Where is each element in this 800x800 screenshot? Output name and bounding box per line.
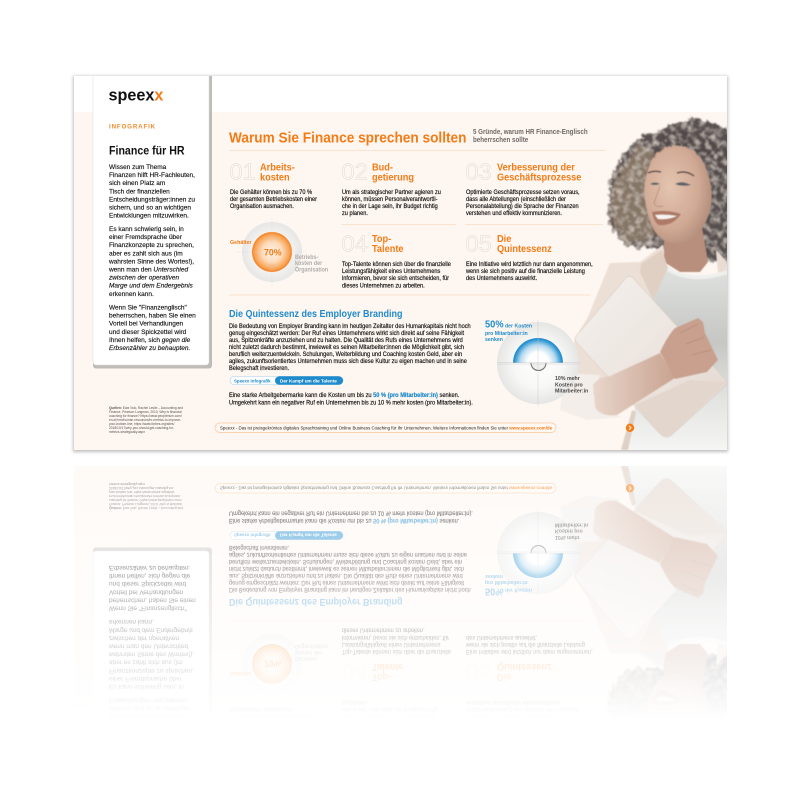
forearm (593, 353, 675, 415)
sidebar paragraph 1: Entwicklungen mitzuwirken. (109, 212, 189, 220)
sidebar paragraph 2: wahrsten Sinne des Wortes!), (108, 258, 194, 265)
reason 04: Top-Talente können sich über die finanzielle (342, 262, 451, 268)
semicircle chart: 50 percent less, 10 percent more: Mitarbeiter:in (555, 388, 588, 395)
reason 01: kosten (260, 172, 290, 184)
reason 01: Organisation ausmachen. (230, 204, 294, 210)
footer pill: Speexx - Das ist preisgekröntes digitales Sprachtraining und Online Business Coaching für Ihr Unternehmen. Weitere Informationen finden Sie unter www.speexx.com/de (220, 425, 552, 431)
sidebar paragraph 3: Vorteil bei Verhandlungen (109, 321, 183, 328)
laptop lower shade (635, 380, 726, 437)
sources note: en-in/hrm/human-resources/hr-metrics-to-improve- (109, 418, 181, 422)
sources note: coaching for finance? https://www.peoplehum.com/ (109, 414, 182, 418)
reason 02: che in der Lage sein, ihr Budget richtig (342, 204, 438, 210)
reason 03: Optimierte Geschäftsprozesse setzen voraus, (466, 190, 580, 196)
sources note: metrics-strategically.aspx (109, 430, 145, 434)
semicircle chart: 50 percent less, 10 percent more: 10% mehr (555, 376, 581, 382)
reason 03: verstehen und effektiv kommunizieren. (466, 211, 562, 217)
photo: smiling woman holding a laptop (560, 118, 732, 452)
sidebar paragraph 1: Finanzen hilft HR-Fachleuten, (109, 172, 195, 179)
infographic sheet with mirrored floor reflection (74, 76, 727, 450)
eyes (650, 182, 691, 186)
reason 01: der gesamten Betriebskosten einer (230, 197, 317, 203)
jacket (570, 245, 672, 400)
sidebar paragraph 3: Wenn Sie "Finanzenglisch" (109, 304, 187, 312)
brows (648, 171, 694, 176)
reason 02: zu planen. (342, 211, 368, 217)
main title: Warum Sie Finance sprechen sollten (229, 130, 466, 147)
sidebar paragraph 1: sich einen Platz am (109, 180, 166, 187)
employer branding section (229, 309, 473, 407)
donut chart: 70 percent salaries (230, 218, 329, 286)
subtitle: 5 Gründe, warum HR Finance-Englisch (473, 129, 588, 136)
reason 05: Eine Initiative wird letztlich nur dann angenommen, (466, 262, 593, 268)
sources note: Finance, Pearson Longman, 2010; Why is financial (109, 410, 182, 414)
link pill: Speexx Infografik (234, 378, 271, 384)
reason 02 (342, 158, 441, 217)
reason 03: Geschäftsprozesse (497, 172, 581, 184)
sidebar paragraph 3: beherrschen, haben Sie einen (109, 312, 196, 320)
sidebar heading: Finance für HR (109, 145, 185, 158)
sidebar paragraph 3: Erbsenzähler zu behaupten. (109, 345, 190, 352)
semicircle chart: 50 percent less, 10 percent more: 50%der Kosten (485, 319, 532, 331)
peach page background (74, 112, 727, 450)
reason 01: Arbeits- (260, 162, 295, 174)
donut chart: 70 percent salaries: Gehälter (230, 240, 252, 246)
reason 05 (465, 230, 593, 282)
lapel (640, 250, 668, 300)
sidebar paragraph 2: aber es zahlt sich aus (im (109, 250, 183, 257)
sidebar paragraph 2: einer Fremdsprache über (109, 234, 183, 241)
sidebar paragraph 1: Entscheidungsträger:innen zu (109, 196, 195, 203)
reason 04: informieren, bevor sie sich entscheiden, für (342, 276, 449, 282)
sidebar paragraph 2: zwischen der operativen (108, 274, 179, 282)
sidebar paragraph 2: wenn man den Unterschied (109, 266, 188, 274)
nose (654, 186, 663, 207)
sources note: Quellen: (109, 406, 122, 410)
donut chart: 70 percent salaries: kosten der (295, 261, 323, 267)
reason 04: 04 (342, 230, 368, 256)
employer branding section: Eine starke Arbeitgebermarke kann die Kosten um bis zu 50 % (pro Mitarbeiter:in) senken. (229, 393, 459, 399)
reason 04: Leistungsfähigkeit eines Unternehmens (342, 269, 440, 275)
reason 05: Die (497, 234, 511, 245)
employer branding section: Die Quintessenz des Employer Branding (229, 309, 403, 320)
reason 02: getierung (372, 172, 414, 184)
reason 05: des Unternehmens auswirkt. (466, 276, 537, 282)
donut chart: 70 percent salaries: 70% (264, 248, 282, 258)
employer branding section: Umgekehrt kann ein negativer Ruf ein Unternehmen bis zu 10 % mehr kosten (pro Mitarbeiter:in). (229, 400, 473, 407)
reason 04: Talente (372, 244, 404, 255)
reason 03 (466, 158, 581, 217)
sidebar paragraph 1: sichern, und so an wichtigen (109, 204, 191, 212)
sources note: Ewa Volo, Rachel Leslie – Accounting and (122, 406, 183, 410)
kicker: INFOGRAFIK (109, 123, 156, 130)
subtitle: beherrschen sollte (473, 137, 529, 144)
neck (664, 228, 708, 272)
reason 04: dieses Unternehmen zu arbeiten. (342, 283, 425, 289)
shirt (628, 268, 732, 452)
reason 05: 05 (466, 230, 492, 256)
reason 03: Personalabteilung) die Sprache der Finanzen (466, 204, 579, 210)
reason 01: 01 (230, 158, 256, 184)
link pill: Der Kampf um die Talente (280, 378, 337, 385)
employer branding section: Die Bedeutung von Employer Branding kann im heutigen Zeitalter des Humankapitals nicht hoch (229, 324, 471, 330)
face (644, 145, 712, 243)
sidebar paragraph 2: Marge und dem Endergebnis (109, 283, 193, 290)
reason 03: Verbesserung der (497, 162, 575, 174)
hair over forehead (650, 130, 726, 200)
reason 02: Bud- (372, 162, 393, 174)
jacket right shoulder (716, 250, 727, 276)
sidebar paragraph 2: Finanzkonzepte zu sprechen, (109, 242, 194, 249)
sidebar paragraph 1: Tisch der finanziellen (109, 188, 170, 195)
logo: speexx (108, 86, 163, 104)
reason 05: Quintessenz (497, 244, 552, 255)
sidebar paragraph 3: Ihnen helfen, sich gegen die (109, 337, 190, 344)
sheet drop shadow (74, 76, 727, 450)
reason 02: 02 (342, 158, 368, 184)
footer pill (215, 423, 556, 432)
employer branding section: beruflich weiterzuentwickeln. Schulungen, Weiterbildung und Coaching kosten Geld, aber ein (229, 352, 462, 358)
lips and teeth (652, 211, 681, 225)
reason 04: Top- (372, 234, 391, 245)
reason 01: Die Gehälter können bis zu 70 % (230, 190, 312, 196)
employer branding section: agiles, zukunftsorientiertes Unternehmen muss sich diese Kultur zu eigen machen und in seine (229, 359, 468, 365)
sidebar paragraph 2: erkennen kann. (109, 291, 154, 298)
laptop (575, 276, 727, 437)
sidebar paragraph 1: Wissen zum Thema (109, 164, 167, 171)
employer branding section: nicht zuletzt dadurch bestimmt, inwieweit es seinen Mitarbeiter:innen die Möglichkeit gibt, sich (229, 345, 464, 351)
jacket lower strip (621, 410, 636, 450)
employer branding section: Belegschaft investieren. (229, 366, 289, 372)
reason 01 (230, 158, 317, 210)
sidebar paragraph 2: Es kann schwierig sein, in (109, 226, 184, 233)
orange arrow button (626, 424, 634, 432)
reason 04 (342, 230, 451, 289)
reason 03: dass alle Abteilungen (einschließlich der (466, 197, 566, 203)
cuff (560, 373, 623, 420)
employer branding section: aus, Spitzenkräfte anzuziehen und zu halten. Die Qualität des Rufs eines Unternehmens wird (229, 338, 463, 344)
sources note: your-bottom-line; https://www.forbes.org/sites/ (109, 422, 174, 426)
sidebar card (93, 70, 212, 368)
donut chart: 70 percent salaries: Organisation (295, 267, 329, 274)
sources note: 2018/10/17/why-you-should-get-coaching-for- (109, 426, 174, 430)
semicircle chart: 50 percent less, 10 percent more: Kosten pro (555, 382, 583, 388)
sidebar paragraph 3: und dieser Spickzettel wird (109, 329, 187, 336)
semicircle chart: 50 percent less, 10 percent more: pro Mitarbeiter:in (485, 331, 528, 337)
collar (664, 265, 727, 277)
reason 05: wenn sie sich positiv auf die finanzielle Leistung (465, 269, 585, 275)
link pill (230, 376, 343, 385)
hand (660, 318, 718, 379)
semicircle chart: 50 percent less, 10 percent more (485, 319, 588, 406)
reason 02: können, müssen Personalverantwortli- (342, 197, 438, 203)
donut chart: 70 percent salaries: Betriebs- (295, 255, 318, 261)
hair left lighter fringe (610, 144, 656, 244)
semicircle chart: 50 percent less, 10 percent more: senken (485, 337, 503, 343)
employer branding section: genug eingeschätzt werden: Der Ruf eines Unternehmens wirkt sich direkt auf seine Fähigkeit (229, 331, 464, 337)
reason 02: Um als strategischer Partner agieren zu (342, 190, 441, 196)
reason 03: 03 (466, 158, 492, 184)
hair back (608, 118, 732, 266)
